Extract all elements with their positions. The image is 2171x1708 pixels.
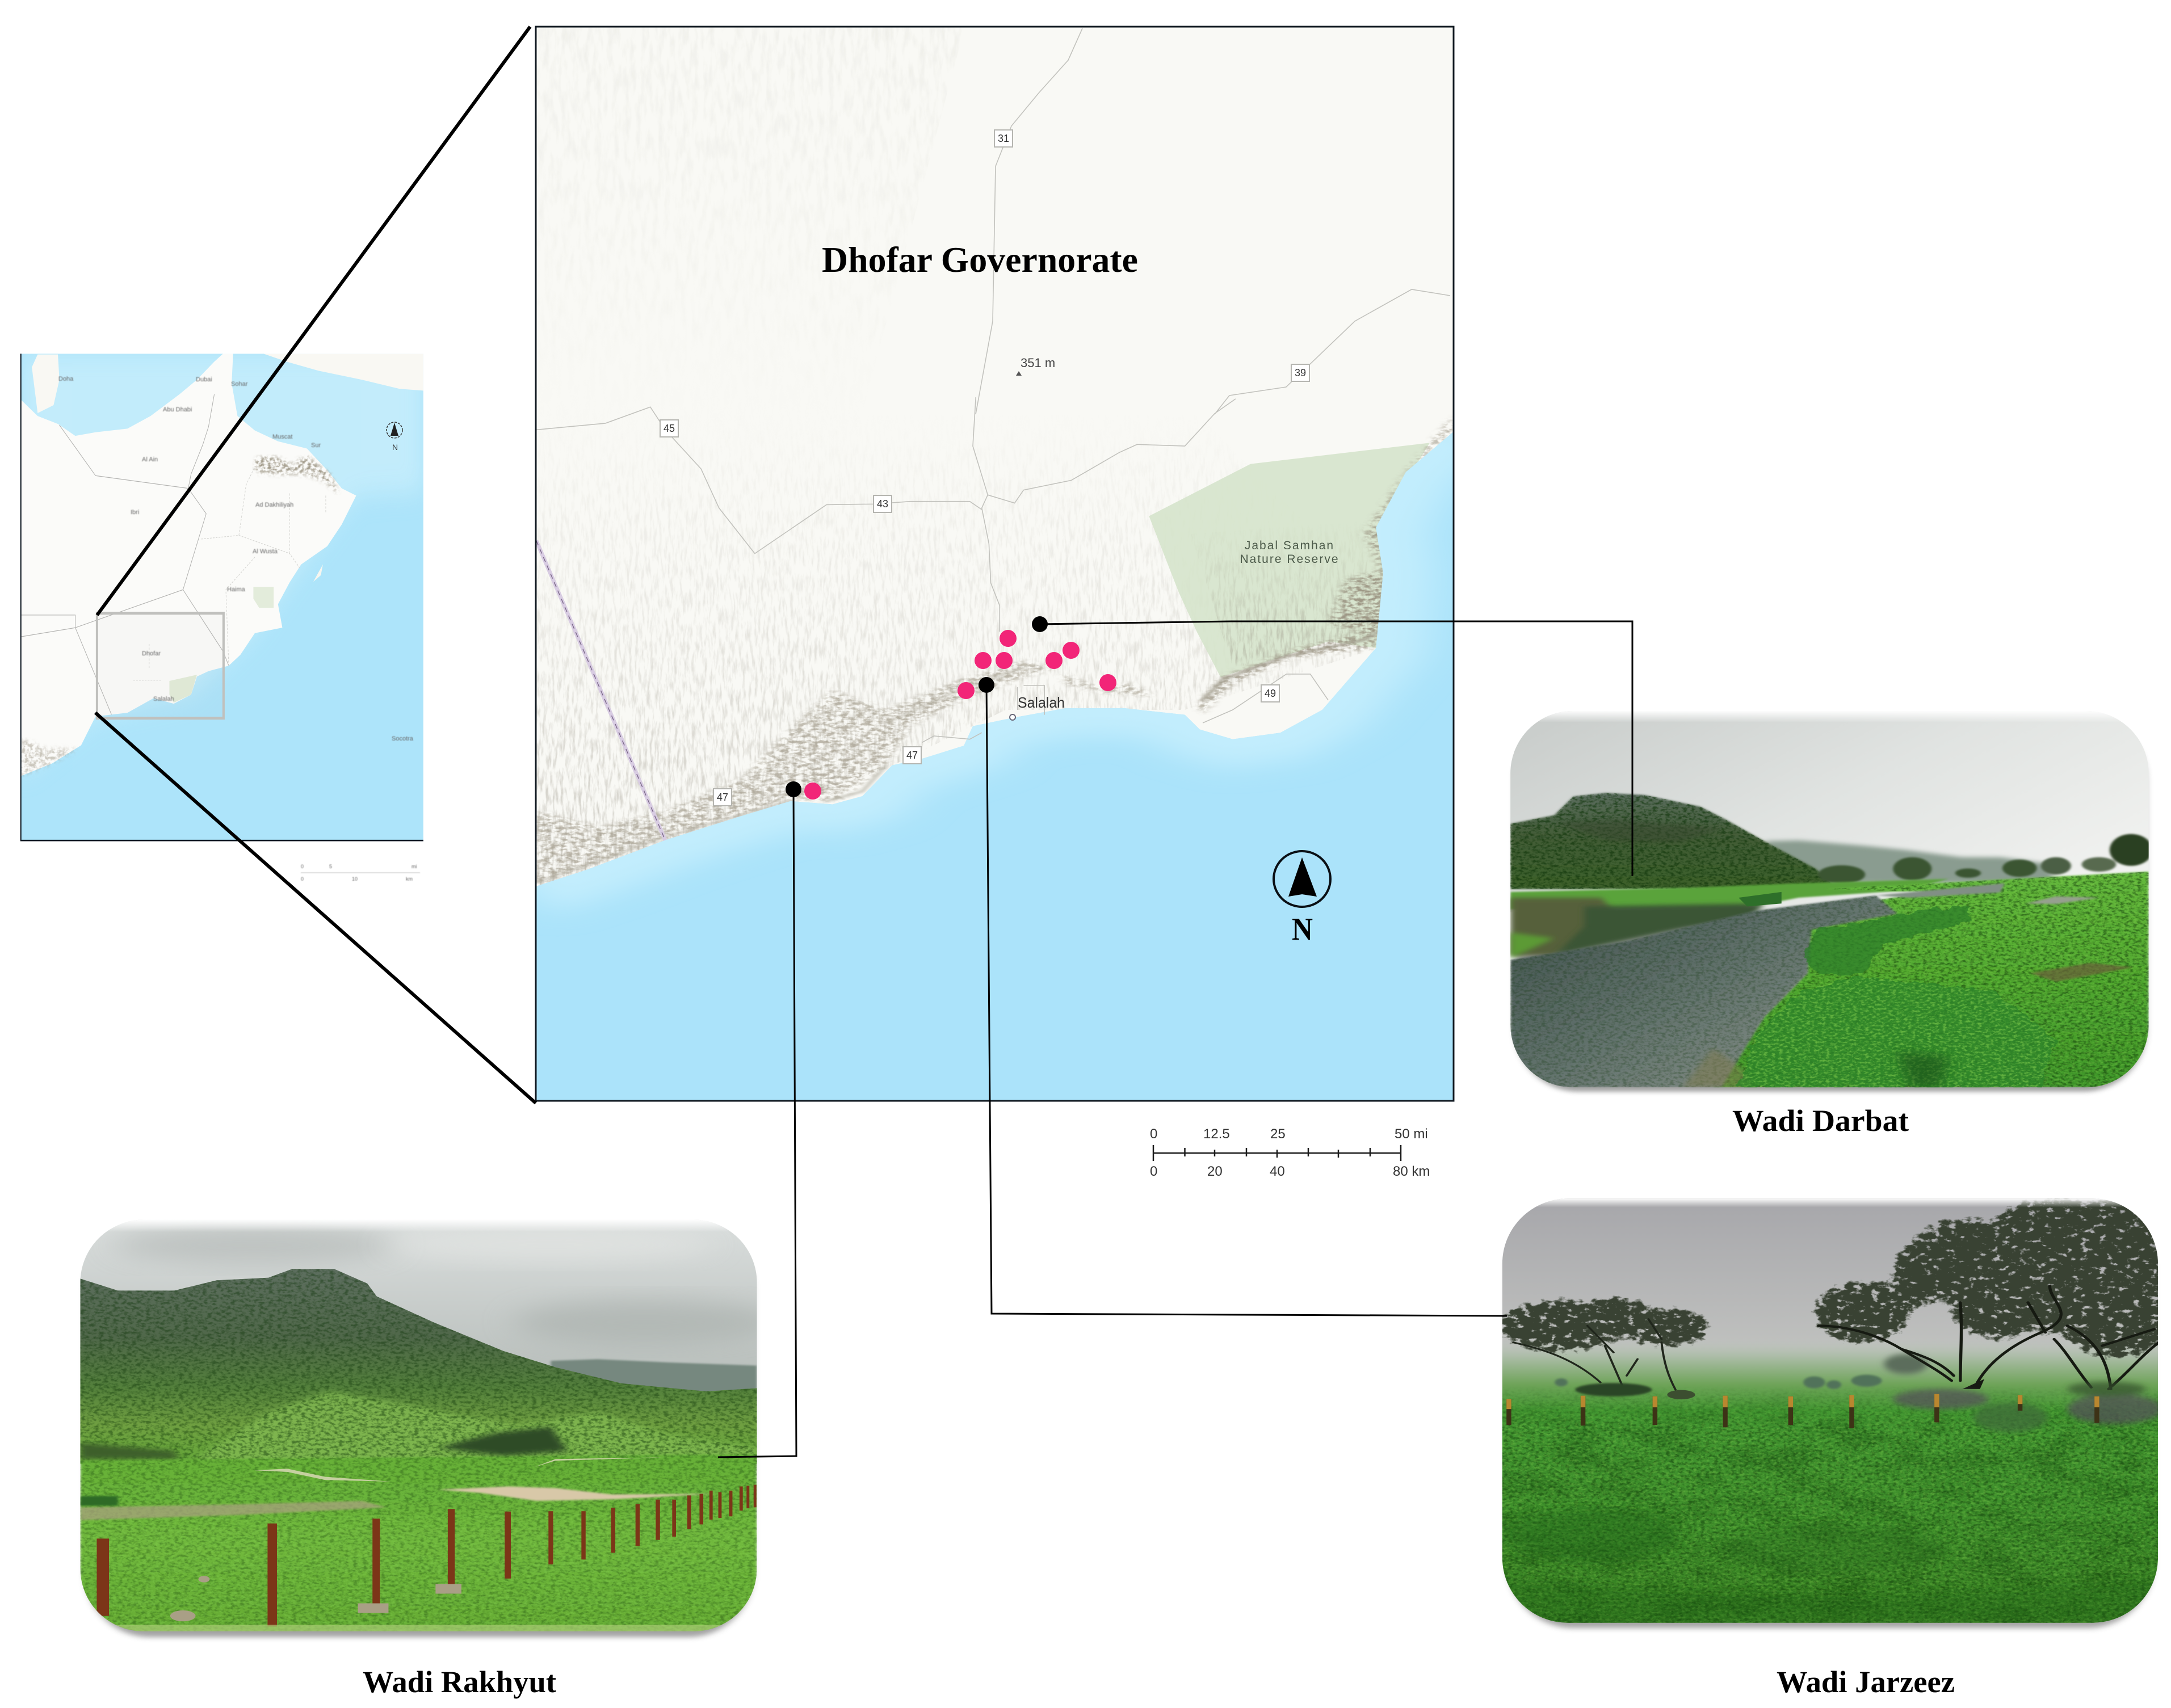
- panel: inset location map of Oman: Al Ain: [142, 456, 158, 463]
- hillshade terrain: [537, 491, 1375, 885]
- escarpment shading: [536, 661, 1053, 886]
- map label: nature reserve: [1240, 539, 1339, 566]
- zoom lines from inset to main map: [95, 27, 536, 1103]
- left tree: [1496, 1296, 1712, 1352]
- road shields: 49: [1265, 688, 1276, 699]
- scale bar: 80 km: [1393, 1164, 1430, 1179]
- panel: inset location map of Oman: Salalah: [153, 696, 174, 702]
- fence posts: [1509, 1394, 2097, 1428]
- roads: [536, 397, 1328, 742]
- scale bar: 12.5: [1203, 1126, 1230, 1142]
- right meadow: [1713, 872, 2149, 1087]
- map label: Dhofar Governorate: Dhofar Governorate: [822, 239, 1138, 280]
- small scale bar: mi: [411, 864, 417, 869]
- sea: [528, 427, 1460, 1114]
- small scale bar: 5: [329, 864, 332, 869]
- road shields: 43: [877, 498, 888, 510]
- map label: peak elevation: [1016, 356, 1055, 376]
- scale bar: 20: [1207, 1164, 1223, 1179]
- icon: north arrow: N: [1292, 912, 1313, 947]
- study sites: pink markers: [804, 630, 1116, 800]
- icon: small north arrow: [387, 422, 402, 452]
- map label: Salalah: Salalah: [1018, 694, 1065, 711]
- fence posts: [96, 1485, 757, 1626]
- scale bar: 40: [1270, 1164, 1285, 1179]
- road shields: 31: [998, 133, 1009, 144]
- panel: inset location map of Oman: Doha: [58, 376, 74, 382]
- panel: inset location map of Oman: Muscat: [272, 434, 292, 440]
- road shields: [660, 130, 1309, 806]
- scale bar: 0: [1150, 1126, 1157, 1142]
- international border: [536, 541, 665, 840]
- land base: [537, 27, 1453, 886]
- scale bar: [1150, 1126, 1430, 1179]
- road shields: 47: [906, 750, 918, 761]
- right trees: [1812, 1198, 2171, 1359]
- caption: Wadi Rakhyut: Wadi Rakhyut: [363, 1665, 556, 1699]
- panel: inset location map of Oman: Abu Dhabi: [163, 406, 192, 413]
- ferns: [1739, 976, 2056, 1087]
- map label: nature reserve: Jabal Samhan: [1245, 539, 1334, 552]
- connector: Wadi Darbat: [1032, 616, 1632, 876]
- panel: photo Wadi Rakhyut: [57, 1216, 795, 1637]
- scale bar: 0: [1150, 1164, 1157, 1179]
- panel: photo Wadi Darbat: [1498, 709, 2171, 1092]
- shrubs: [1893, 1382, 2163, 1432]
- icon: north arrow: [1274, 851, 1330, 947]
- caption: Wadi Jarzeez: Wadi Jarzeez: [1777, 1665, 1955, 1699]
- road shields: 47: [717, 792, 728, 803]
- panel: inset location map of Oman: Sur: [311, 442, 321, 449]
- map label: Salalah: [1010, 694, 1065, 720]
- small scale bar: 10: [352, 876, 358, 882]
- connector: Wadi Rakhyut: [718, 781, 801, 1457]
- river: [1510, 895, 1897, 1087]
- map label: peak elevation: 351 m: [1021, 356, 1055, 370]
- map label: nature reserve: Nature Reserve: [1240, 553, 1339, 566]
- small scale bar: [301, 864, 420, 882]
- panel: inset location map of Oman: Al Wusta: [253, 548, 278, 555]
- panel: photo Wadi Jarzeez: [1487, 1196, 2171, 1628]
- small scale bar: km: [406, 876, 413, 882]
- panel: inset location map of Oman: Dhofar: [142, 650, 161, 657]
- connector: Wadi Jarzeez: [979, 677, 1507, 1316]
- panel: inset location map of Oman: Haima: [227, 586, 246, 593]
- scale bar: 25: [1270, 1126, 1286, 1142]
- panel: main map of Dhofar Governorate: [528, 27, 1460, 1114]
- road shields: 45: [664, 423, 675, 434]
- panel: inset location map of Oman: Sohar: [231, 381, 248, 388]
- extent box: [97, 613, 224, 718]
- panel: inset location map of Oman: Socotra: [392, 735, 414, 742]
- panel: inset location map of Oman: [21, 354, 423, 882]
- scale bar: 50 mi: [1395, 1126, 1428, 1142]
- icon: small north arrow: N: [392, 443, 398, 452]
- caption: Wadi Darbat: Wadi Darbat: [1732, 1104, 1909, 1138]
- small scale bar: 0: [301, 864, 304, 869]
- small scale bar: 0: [301, 876, 304, 882]
- valley floor: [80, 1454, 757, 1631]
- panel: inset location map of Oman: Ad Dakhiliyah: [255, 502, 293, 508]
- map frame: [536, 27, 1454, 1101]
- left bank: [1510, 879, 1949, 909]
- panel: inset location map of Oman: Dubai: [196, 376, 212, 383]
- road shields: 39: [1295, 367, 1306, 378]
- panel: inset location map of Oman: Ibri: [131, 509, 139, 516]
- nature reserve: [1149, 443, 1430, 678]
